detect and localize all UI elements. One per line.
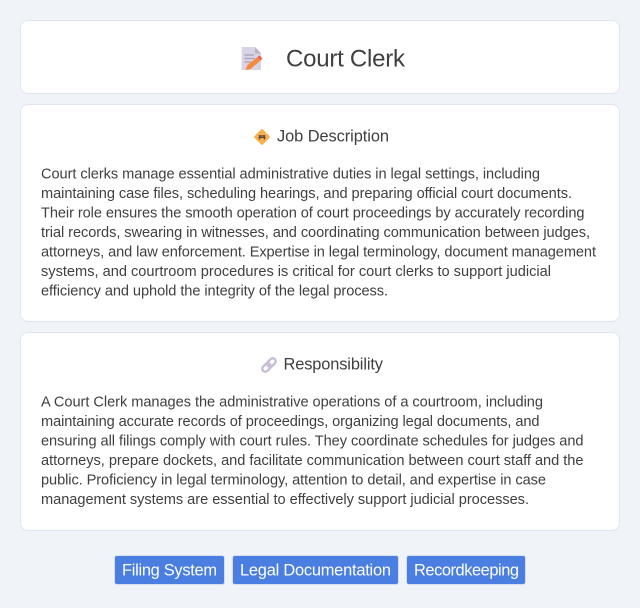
text block: responsibility: management systems are essential to effectively support judicial processes. bbox=[41, 492, 529, 508]
title: Court Clerk bbox=[286, 46, 406, 72]
tag: Legal Documentation bbox=[232, 554, 399, 584]
text block: responsibility: A Court Clerk manages the administrative operations of a courtroom, including bbox=[41, 394, 543, 410]
tag: Recordkeeping bbox=[406, 554, 526, 584]
tag: Legal Documentation: Legal Documentation bbox=[240, 561, 390, 579]
icon: chain link bbox=[261, 357, 277, 373]
heading: responsibility: Responsibility bbox=[284, 356, 384, 374]
text block: responsibility: public. Proficiency in legal terminology, attention to detail, and expertise in case bbox=[41, 472, 546, 488]
text block: responsibility bbox=[41, 394, 584, 508]
tag: Recordkeeping: Recordkeeping bbox=[414, 561, 518, 579]
panel: job description bbox=[20, 104, 620, 322]
text block: job description bbox=[41, 166, 596, 300]
text block: job description: efficiency and uphold the integrity of the legal process. bbox=[41, 284, 388, 300]
text block: job description: attorneys, and law enforcement. Expertise in legal terminology, document management bbox=[41, 244, 596, 260]
panel: responsibility bbox=[20, 332, 620, 531]
text block: job description: Court clerks manage essential administrative duties in legal settings, including bbox=[41, 166, 540, 182]
tag: Filing System bbox=[114, 554, 225, 584]
text block: responsibility: attorneys, prepare dockets, and facilitate communication between court staff and the bbox=[41, 453, 584, 469]
icon: document with pencil bbox=[242, 47, 262, 70]
tag: Filing System: Filing System bbox=[122, 561, 217, 579]
text block: job description: systems, and courtroom procedures is critical for court clerks to support judicial bbox=[41, 264, 551, 280]
panel: title header bbox=[20, 20, 620, 94]
text block: job description: Their role ensures the smooth operation of court proceedings by accurately recording bbox=[41, 206, 584, 222]
text block: job description: trial records, swearing in witnesses, and coordinating communication between judges, bbox=[41, 225, 590, 241]
icon: orange diamond bbox=[254, 129, 270, 145]
text block: job description: maintaining case files, scheduling hearings, and preparing official court documents. bbox=[41, 186, 572, 202]
text block: responsibility: ensuring all filings comply with court rules. They coordinate schedules for judges and bbox=[41, 434, 584, 450]
heading: job description: Job Description bbox=[277, 128, 389, 146]
text block: responsibility: maintaining accurate records of proceedings, organizing legal documents, and bbox=[41, 414, 540, 430]
